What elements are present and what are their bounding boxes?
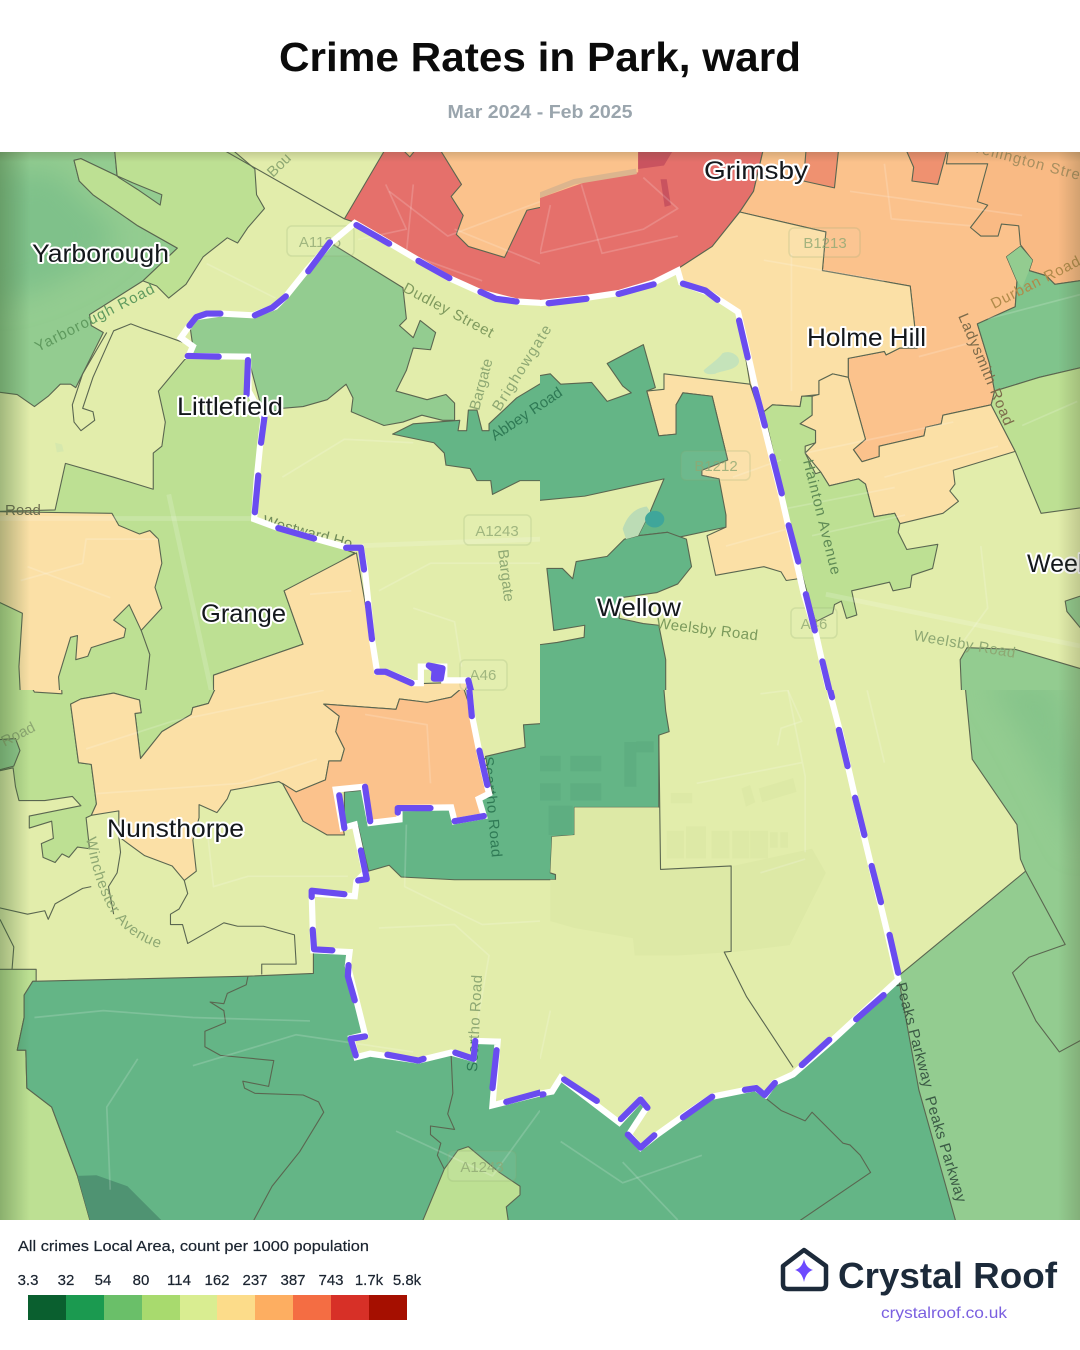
road name labels (1, 152, 1080, 1201)
road number shields (287, 226, 860, 1181)
ward boundary: Park (181, 223, 898, 1148)
road name labels: Peaks Parkway (892, 981, 937, 1090)
road name labels: Abbey Road (488, 384, 566, 444)
road name labels: Bargate (466, 357, 496, 412)
map edge shading (0, 152, 1080, 1220)
map area: south-east (530, 670, 1080, 1231)
streets (34, 690, 540, 1190)
legend: crime rate colour scale: 54 (95, 1272, 111, 1289)
legend: crime rate colour scale: 3.3 (18, 1272, 38, 1289)
legend: crime rate colour scale: 387 (280, 1272, 306, 1289)
road name labels: Scartho Road (464, 974, 486, 1072)
logo: Crystal Roof: Crystal Roof (838, 1255, 1058, 1296)
legend: crime rate colour scale: 162 (204, 1272, 230, 1289)
streets (540, 690, 884, 1220)
area name labels: Nunsthorpe (107, 815, 244, 843)
road name labels: Road (5, 502, 41, 519)
legend: crime rate colour scale: 237 (242, 1272, 268, 1289)
area name labels (32, 157, 1080, 843)
legend: crime rate colour scale: 1.7k (355, 1272, 384, 1289)
road name labels: Dudley Street (400, 280, 497, 342)
area name labels: Grimsby (704, 157, 809, 185)
legend: crime rate colour scale: 743 (318, 1272, 344, 1289)
road name labels: Scartho Road (479, 756, 505, 858)
area name labels: Yarborough (32, 240, 169, 268)
road name labels: Bargate (494, 548, 517, 603)
legend title: All crimes Local Area, count per 1000 population (18, 1238, 369, 1255)
streets (0, 184, 540, 701)
road name labels: Hainton Avenue (799, 458, 844, 576)
road number shields: A1243 (475, 523, 519, 540)
area name labels: Wellow (597, 594, 682, 622)
road name labels: Winchester Avenue (86, 836, 160, 948)
road name labels: Ladysmith Road (954, 311, 1017, 428)
road name labels: Bou (264, 150, 295, 181)
logo: Crystal Roof (783, 1250, 1058, 1296)
icon: house with star (783, 1250, 826, 1289)
map area: north-west (0, 140, 551, 701)
streets (540, 164, 1080, 646)
legend: crime rate colour scale: 80 (133, 1272, 149, 1289)
road number shields: B1212 (694, 458, 738, 475)
road name labels: Weelsby Road (656, 615, 759, 644)
road number shields: A1243 (460, 1159, 504, 1176)
area name labels: Grange (201, 600, 286, 628)
title: Crime Rates in Park, ward (279, 34, 801, 80)
map area: south-west (0, 670, 551, 1231)
road name labels: Peaks Parkway (921, 1094, 970, 1205)
road name labels: Weelsby Road (912, 627, 1017, 662)
road number shields: B1213 (803, 235, 847, 252)
legend: crime rate colour scale: 5.8k (393, 1272, 422, 1289)
road name labels: Yarborough Road (32, 280, 157, 356)
legend: crime rate colour scale (18, 1272, 422, 1320)
road number shields: A46 (801, 616, 827, 633)
road number shields: A1136 (299, 234, 341, 251)
subtitle: date range: Mar 2024 - Feb 2025 (448, 101, 632, 122)
website url: crystalroof.co.uk (881, 1305, 1008, 1322)
road name labels: Brighowgate (489, 322, 555, 414)
road name labels: Westward Ho (261, 512, 354, 553)
area name labels: Littlefield (177, 393, 283, 421)
legend: crime rate colour scale: 114 (167, 1272, 191, 1289)
map area: north-east (530, 140, 1080, 701)
road number shields: A46 (470, 667, 496, 684)
area name labels: Holme Hill (807, 324, 926, 352)
legend: crime rate colour scale: 32 (58, 1272, 74, 1289)
park ponds (623, 352, 739, 539)
